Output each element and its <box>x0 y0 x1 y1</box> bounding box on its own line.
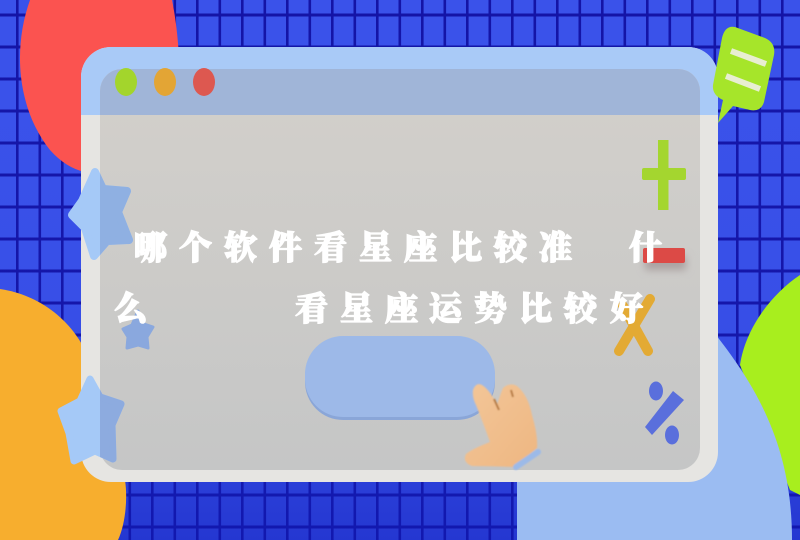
icon: bottom left star <box>61 379 121 461</box>
title line 1: 哪个软件看星座比较准 <box>134 229 572 266</box>
icon: red minus <box>643 248 686 270</box>
window control: orange dot <box>154 68 176 96</box>
panel title strip <box>100 69 700 115</box>
icon: green plus <box>642 140 686 210</box>
window frame <box>81 47 718 482</box>
browser window <box>81 47 718 482</box>
window control: red dot <box>193 68 215 96</box>
icon: blue percent sign <box>645 382 684 444</box>
icon: orange multiply sign <box>619 299 650 351</box>
title line 2 end: 看星座运势比较好 <box>295 290 643 327</box>
icon: speech bubble with equals sign <box>713 27 774 123</box>
window content panel <box>100 69 700 470</box>
icon: small star <box>123 311 153 348</box>
hand: wristband <box>516 452 538 467</box>
blob: lime green <box>740 275 800 495</box>
window title bar <box>81 47 718 115</box>
blob: red <box>20 0 180 172</box>
title line 1 continued: 什 <box>629 229 662 266</box>
icon: pointing hand <box>465 384 538 467</box>
title text <box>114 229 662 327</box>
blob: light blue <box>517 330 792 540</box>
window control: green dot <box>115 68 137 96</box>
button: blue pill <box>305 336 495 420</box>
blob: orange <box>0 289 126 540</box>
title line 2 start: 么 <box>114 290 150 327</box>
hand: finger creases <box>494 390 513 410</box>
icon: top left star <box>72 172 129 256</box>
